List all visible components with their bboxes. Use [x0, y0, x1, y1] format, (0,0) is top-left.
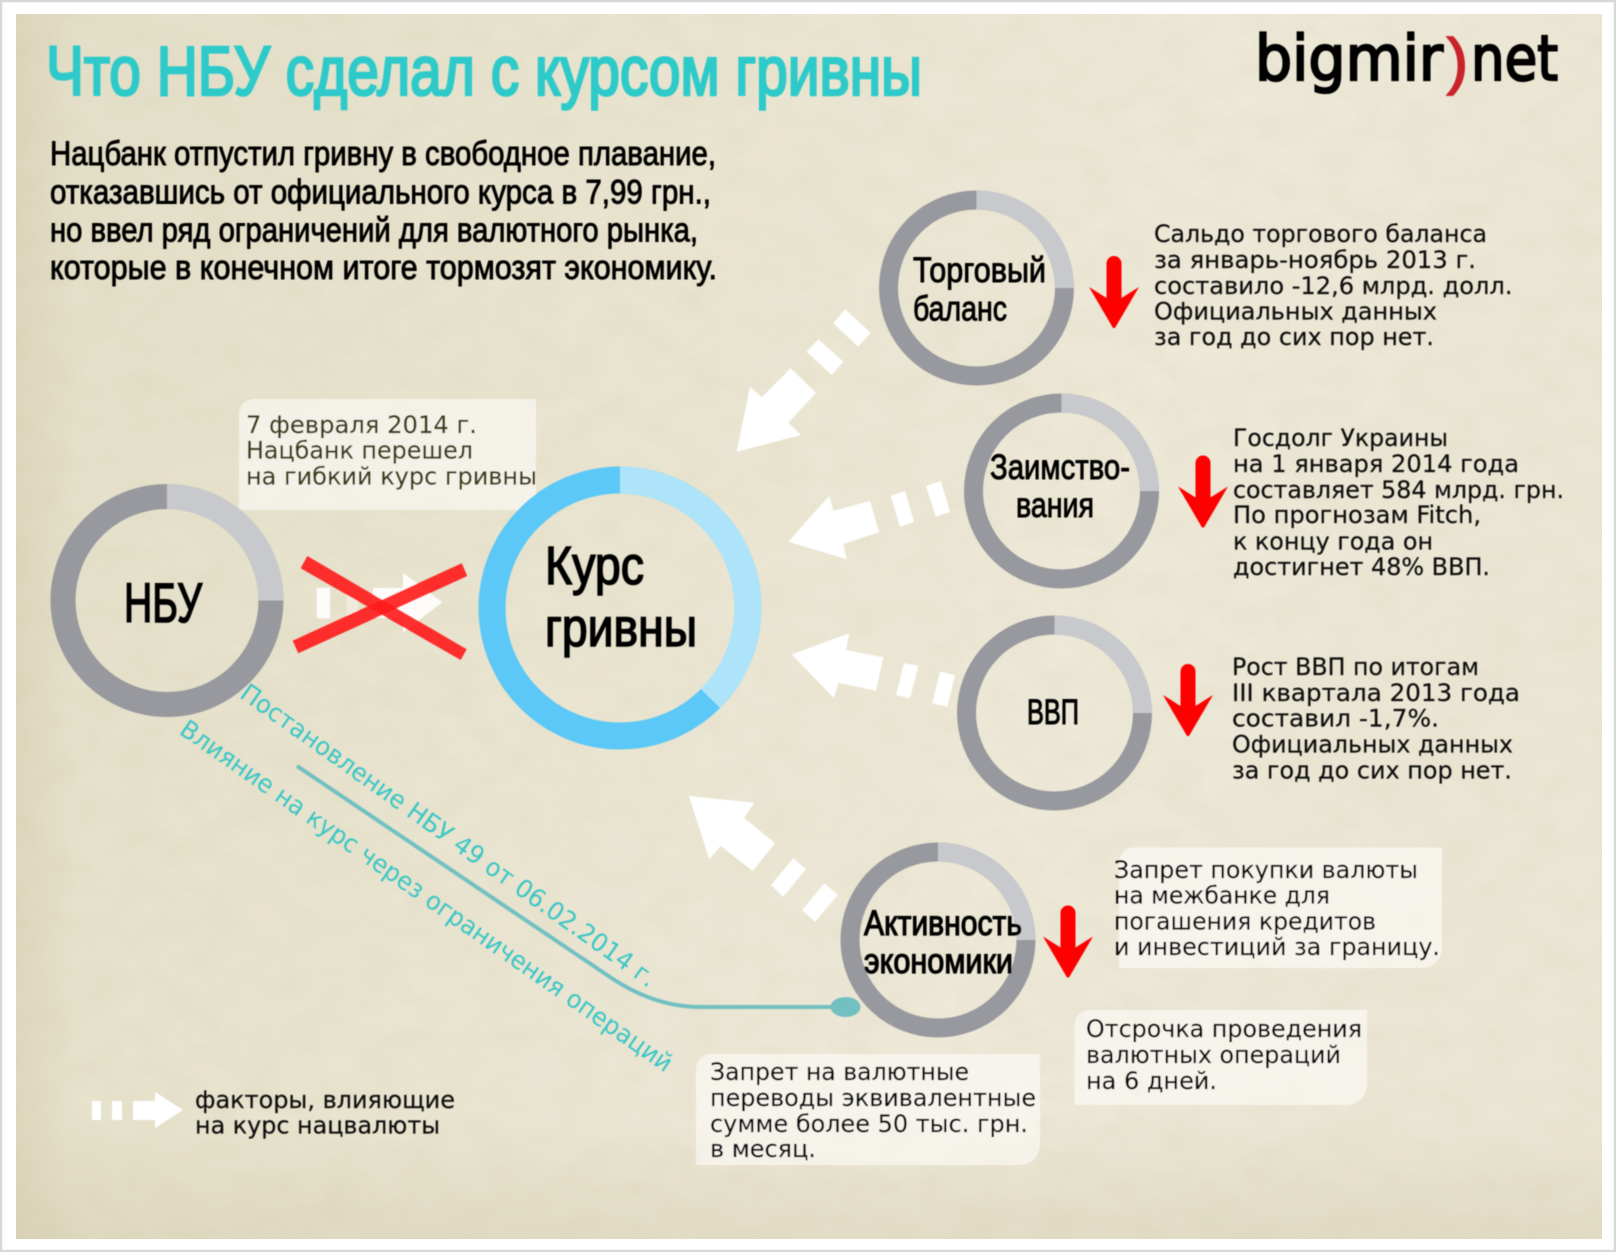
callout: operations delay	[1074, 1010, 1367, 1105]
ring: Курс гривны	[492, 480, 748, 736]
intro text: которые в конечном итоге тормозят экономику.	[50, 249, 717, 287]
ring: Торговый баланс	[888, 200, 1064, 376]
callout: interbank ban	[1114, 848, 1442, 968]
rotated label: influence: Влияние на курс через ограничения операций	[175, 714, 678, 1078]
text: public debt: Госдолг Украины	[1233, 424, 1448, 452]
callout: currency transfer ban: переводы эквивалентные	[710, 1084, 1036, 1112]
legend	[92, 1086, 455, 1140]
legend text	[195, 1086, 455, 1140]
red arrow: GDP down	[1163, 664, 1213, 736]
text: trade balance: Сальдо торгового баланса	[1154, 220, 1487, 248]
text: trade balance: за год до сих пор нет.	[1154, 323, 1434, 351]
logo: bigmir)net	[1255, 22, 1558, 96]
callout: interbank ban: Запрет покупки валюты	[1114, 856, 1418, 884]
arrow: economic activity to rate	[689, 796, 838, 922]
ring: Торговый баланс: Торговый	[913, 251, 1046, 290]
red arrow: activity down	[1043, 906, 1093, 978]
arrow: GDP to rate	[792, 633, 955, 707]
text: public debt: на 1 января 2014 года	[1233, 450, 1519, 478]
callout: interbank ban: на межбанке для	[1114, 882, 1330, 910]
rotated label: resolution: Постановление НБУ 49 от 06.02.2014 г.	[235, 678, 662, 993]
arrow: trade balance to rate	[737, 309, 871, 452]
text: GDP growth	[1232, 653, 1520, 784]
callout: 7 февраля 2014	[239, 399, 537, 510]
text: public debt: По прогнозам Fitch,	[1233, 501, 1481, 529]
ring: Заимствования: Заимство-	[990, 448, 1130, 487]
callout: operations delay: на 6 дней.	[1086, 1067, 1217, 1095]
callout: 7 февраля 2014: на гибкий курс гривны	[246, 462, 537, 490]
text: trade balance: Официальных данных	[1154, 298, 1437, 326]
ring: Активность экономики	[850, 852, 1026, 1028]
callout: interbank ban: и инвестиций за границу.	[1114, 933, 1440, 961]
connector line with dot	[297, 766, 860, 1017]
text: trade balance: составило -12,6 млрд. долл.	[1154, 272, 1512, 300]
ring: Активность экономики: экономики	[864, 942, 1013, 981]
ring: ВВП	[966, 625, 1142, 801]
text: GDP growth: составил -1,7%.	[1232, 704, 1439, 732]
callout: operations delay: валютных операций	[1086, 1041, 1341, 1069]
text: public debt: достигнет 48% ВВП.	[1233, 553, 1490, 581]
logo: bigmir)net: net	[1471, 22, 1558, 95]
ring: Торговый баланс: баланс	[913, 290, 1007, 328]
intro text: но ввел ряд ограничений для валютного рынка,	[50, 212, 698, 250]
crossed-out arrow: НБУ to rate	[293, 556, 467, 660]
logo: bigmir)net: bigmir	[1255, 22, 1443, 95]
intro text	[50, 135, 717, 287]
text: GDP growth: III квартала 2013 года	[1232, 679, 1520, 707]
text: GDP growth: Официальных данных	[1232, 730, 1513, 758]
text: public debt: составляет 584 млрд. грн.	[1233, 476, 1564, 504]
ring: НБУ: НБУ	[124, 571, 202, 634]
red arrow: borrowing down	[1178, 456, 1228, 528]
text: public debt	[1233, 424, 1564, 581]
legend text: на курс нацвалюты	[195, 1112, 440, 1140]
legend text: факторы, влияющие	[195, 1086, 455, 1114]
intro text: отказавшись от официального курса в 7,99 грн.,	[50, 174, 711, 212]
callout: currency transfer ban	[696, 1054, 1040, 1165]
text: GDP growth: Рост ВВП по итогам	[1232, 653, 1479, 681]
arrow: borrowing to rate	[788, 481, 950, 559]
title: Что НБУ сделал с курсом гривны	[46, 32, 922, 110]
text: trade balance: за январь-ноябрь 2013 г.	[1154, 246, 1476, 274]
intro text: Нацбанк отпустил гривну в свободное плавание,	[50, 135, 716, 173]
logo: bigmir)net: )	[1447, 27, 1468, 96]
ring: Курс гривны: гривны	[545, 598, 697, 658]
callout: interbank ban: погашения кредитов	[1114, 908, 1376, 936]
callout: 7 февраля 2014: 7 февраля 2014 г.	[246, 411, 477, 439]
ring: НБУ	[63, 496, 271, 704]
callout: currency transfer ban: в месяц.	[710, 1135, 816, 1163]
callout: currency transfer ban: сумме более 50 тыс. грн.	[710, 1110, 1028, 1138]
ring: ВВП: ВВП	[1027, 693, 1079, 732]
callout: operations delay: Отсрочка проведения	[1086, 1015, 1362, 1043]
callout: currency transfer ban: Запрет на валютные	[710, 1058, 969, 1086]
ring: Заимствования: вания	[1016, 486, 1094, 525]
legend arrow	[92, 1092, 183, 1128]
text: trade balance	[1154, 220, 1512, 351]
ring: Активность экономики: Активность	[864, 904, 1022, 943]
ring: Заимствования	[974, 403, 1150, 579]
ring: Курс гривны: Курс	[545, 536, 644, 596]
text: public debt: к концу года он	[1233, 528, 1433, 556]
red arrow: trade balance down	[1089, 256, 1139, 328]
callout: 7 февраля 2014: Нацбанк перешел	[246, 436, 473, 464]
text: GDP growth: за год до сих пор нет.	[1232, 756, 1512, 784]
